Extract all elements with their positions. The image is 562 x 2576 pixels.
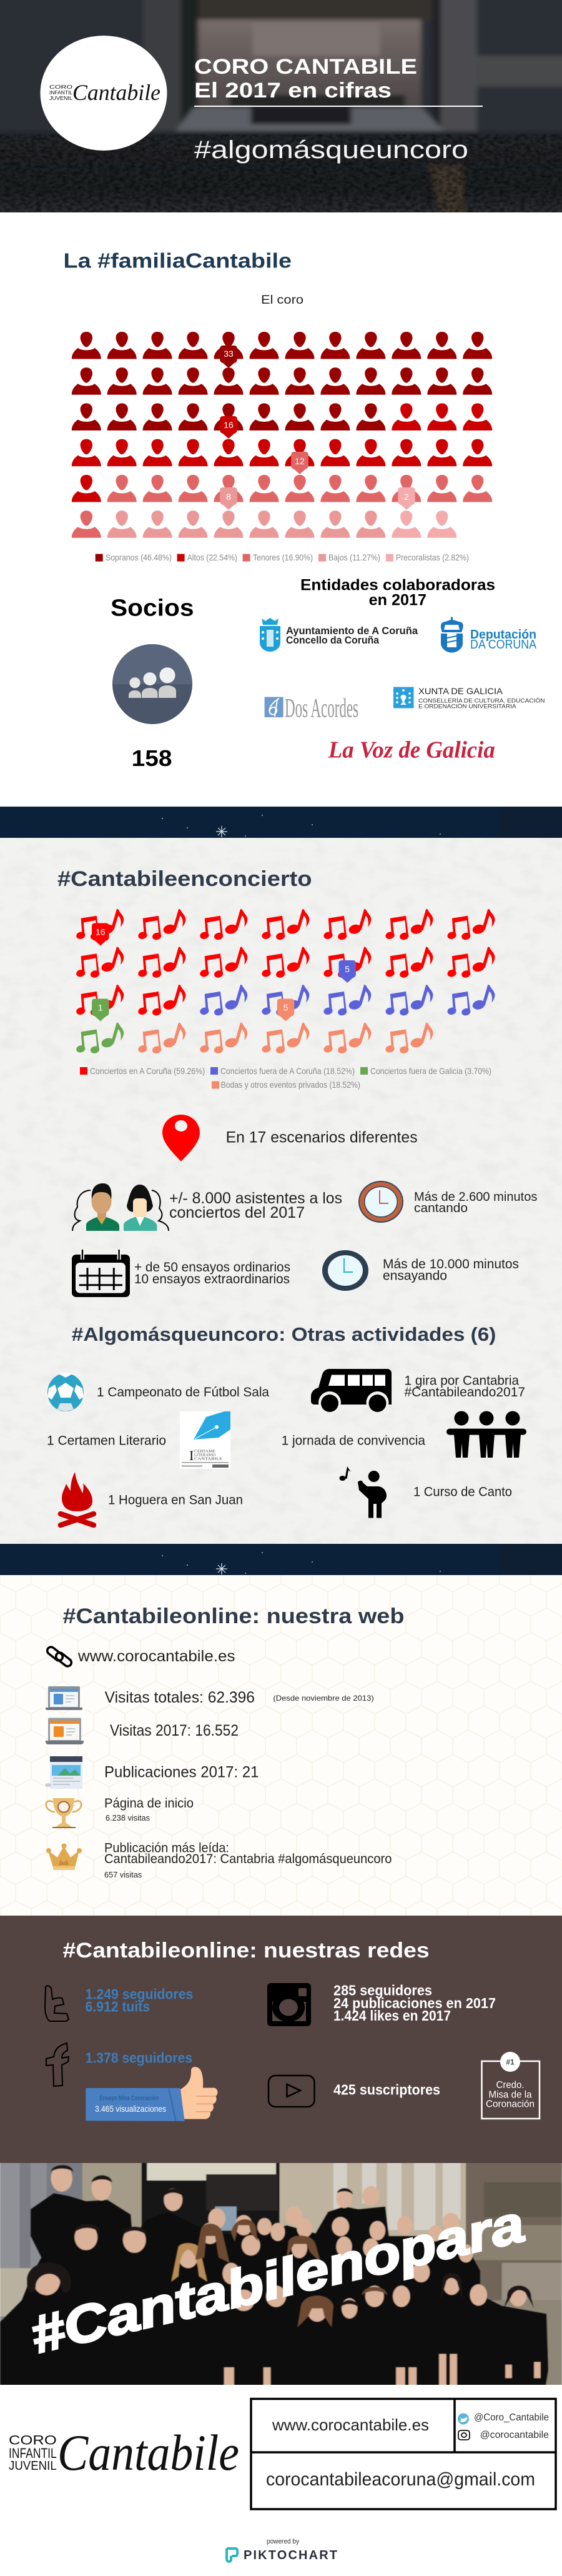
logo circle: Cantabile: JUVENIL (49, 96, 73, 101)
icon: facebook sketch (46, 2043, 69, 2086)
icon: group of members (112, 644, 192, 724)
text: publicacion mas leida (104, 1841, 392, 1879)
callout: most viewed video: Credo. (496, 2080, 525, 2091)
band: starry night divider (0, 1544, 562, 1575)
logo: Ayuntamiento de A Coruña: Concello da Coruña (286, 634, 379, 646)
icon: twitter sketch (45, 1986, 69, 2021)
text: web url: www.corocantabile.es (77, 1648, 235, 1665)
icon: calendar (72, 1250, 130, 1297)
hair of the choir (27, 2165, 534, 2309)
heading: nuestras redes: #Cantabileonline: nuestras redes (62, 1939, 430, 1962)
title: El 2017 en cifras (194, 79, 392, 102)
chart title: El coro: El coro (261, 294, 303, 307)
logo: Dos Acordes: Dos Acordes (285, 694, 358, 724)
value tags: 5 (283, 1002, 288, 1012)
text: pagina de inicio (104, 1796, 194, 1823)
logo: Ayuntamiento de A Coruña (260, 618, 418, 652)
text: website: www.corocantabile.es (272, 2415, 429, 2434)
text: futbol: 1 Campeonato de Fútbol Sala (97, 1385, 269, 1400)
panel: group photo of the choir (0, 2156, 562, 2392)
footer: powered by Piktochart: PIKTOCHART (244, 2549, 337, 2562)
icon: clock orange (358, 1181, 403, 1223)
text: pagina de inicio: 6.238 visitas (106, 1813, 150, 1823)
text: gira: #Cantabileando2017 (405, 1385, 525, 1400)
callout: most viewed video (482, 2052, 540, 2119)
overlay slogan: #Cantabilenopara (25, 2194, 530, 2365)
text: visitas totales: Visitas totales: 62.396 (105, 1689, 255, 1706)
value tags: 12 (295, 456, 305, 466)
text: ensayos: + de 50 ensayos ordinarios (134, 1260, 290, 1275)
icon: laptop blue (46, 1686, 82, 1710)
text: twitter numbers (86, 1986, 193, 2015)
legend: concerts: Conciertos fuera de A Coruña (18.52%) (220, 1066, 355, 1076)
text: minutos ensayando: Más de 10.000 minutos (383, 1257, 519, 1271)
text: facebook numbers: 1.378 seguidores (86, 2050, 192, 2066)
value tags (92, 923, 356, 1021)
icon: publication (45, 1756, 82, 1789)
panel: Socios (111, 595, 194, 771)
icon: bonfire (61, 1472, 94, 1525)
text: instagram numbers: 24 publicaciones en 2017 (333, 1995, 496, 2011)
text: gira (405, 1373, 525, 1400)
legend: concerts: Bodas y otros eventos privados (18.52%) (221, 1080, 360, 1090)
logo: Coro Infantil Juvenil Cantabile: CORO (9, 2434, 57, 2448)
footer: powered by Piktochart (227, 2538, 337, 2562)
icon: twitter small (458, 2413, 469, 2424)
logo: Coro Infantil Juvenil Cantabile: JUVENIL (9, 2459, 57, 2473)
text: visitas totales (105, 1689, 374, 1706)
image: certamen poster: LITERARIO (194, 1453, 215, 1457)
panel: Socios: Socios (111, 595, 194, 622)
logo: Coro Infantil Juvenil Cantabile: Cantabile (57, 2424, 239, 2481)
logo: Xunta de Galicia: E ORDENACIÓN UNIVERSITARIA (418, 704, 516, 710)
icon: clock navy (322, 1250, 368, 1291)
icon: singer (340, 1466, 387, 1518)
value tags: 2 (404, 492, 409, 502)
logo circle: Cantabile (40, 36, 167, 151)
text: twitter handle: @Coro_Cantabile (474, 2412, 549, 2423)
image: certamen poster: CANTABILE (194, 1457, 222, 1461)
legend: choir voices: Tenores (16.90%) (253, 552, 313, 562)
heading: otras actividades: #Algomásqueuncoro: Otras actividades (6) (72, 1323, 496, 1345)
heading: nuestra web: #Cantabileonline: nuestra web (62, 1604, 405, 1628)
legend: concerts: Conciertos fuera de Galicia (3.70%) (370, 1066, 491, 1076)
icon: trophy (46, 1798, 81, 1828)
pictogram chart: concerts (76, 909, 495, 1054)
icon: instagram small (458, 2430, 470, 2440)
logo: Dos Acordes (265, 694, 358, 724)
logo: Deputación da Coruña: DA CORUÑA (470, 637, 537, 652)
text: curso: 1 Curso de Canto (413, 1485, 512, 1499)
icon: bus (311, 1369, 392, 1414)
panel: contact table (251, 2399, 556, 2509)
text: instagram handle: @corocantabile (480, 2430, 549, 2440)
text: minutos cantando: Más de 2.600 minutos (414, 1190, 537, 1204)
value tags: 5 (345, 964, 350, 974)
icon: instagram (267, 1983, 311, 2026)
text: visitas totales: (Desde noviembre de 2013) (273, 1694, 374, 1703)
legend: choir voices (96, 552, 469, 562)
legend: choir voices: Bajos (11.27%) (328, 552, 380, 562)
value tags: 1 (98, 1002, 103, 1012)
text: gira: 1 gira por Cantabria (405, 1373, 519, 1388)
text: minutos cantando (414, 1190, 537, 1215)
text: minutos cantando: cantando (414, 1201, 468, 1215)
icon: link (46, 1646, 73, 1668)
title: #algomásqueuncoro (194, 136, 468, 164)
text: instagram numbers (333, 1982, 496, 2024)
icon: football (47, 1373, 84, 1411)
value tags (220, 346, 415, 510)
icon: thumbs up with video views: Ensayo Misa Coronación (99, 2095, 159, 2102)
legend: choir voices: Altos (22.54%) (187, 552, 237, 562)
band: starry night divider (0, 807, 562, 838)
text: instagram numbers: 285 seguidores (333, 1982, 432, 1999)
icon: youtube (269, 2076, 315, 2107)
callout: most viewed video: #1 (506, 2058, 515, 2067)
text: twitter numbers: 1.249 seguidores (86, 1986, 193, 2002)
logo circle: Cantabile: CORO (49, 84, 72, 90)
text: youtube numbers: 425 suscriptores (333, 2082, 440, 2098)
logo: Deputación da Coruña (441, 617, 537, 653)
icon: three people (446, 1411, 526, 1458)
image: certamen poster: I (189, 1448, 194, 1463)
panel: Socios: 158 (132, 745, 172, 771)
panel: Entidades colaboradoras (260, 577, 545, 763)
legend: choir voices: Sopranos (46.48%) (106, 552, 172, 562)
text: hoguera: 1 Hoguera en San Juan (108, 1493, 243, 1508)
callout: most viewed video: Coronación (486, 2099, 535, 2110)
logo: Xunta de Galicia (393, 686, 545, 710)
text: publicaciones: Publicaciones 2017: 21 (104, 1764, 259, 1781)
value tags: 16 (96, 927, 106, 937)
logo: Xunta de Galicia: XUNTA DE GALICIA (418, 686, 503, 696)
text: certamen: 1 Certamen Literario (47, 1433, 166, 1448)
logo: Ayuntamiento de A Coruña: Ayuntamiento de A Coruña (286, 625, 418, 637)
panel: Entidades colaboradoras: en 2017 (369, 592, 426, 609)
text: asistentes: conciertos del 2017 (169, 1204, 305, 1221)
text: publicacion mas leida: Cantabileando2017: Cantabria #algomásqueuncoro (104, 1852, 392, 1866)
image: certamen poster: CERTAME (194, 1450, 215, 1453)
heading: La #familiaCantabile: La #familiaCantabile (64, 249, 292, 272)
legend: concerts: Conciertos en A Coruña (59.26%) (90, 1066, 205, 1076)
logo: Coro Infantil Juvenil Cantabile: INFANTIL (9, 2445, 57, 2461)
panel: header photo of the concert hall (0, 0, 562, 226)
icon: map pin (162, 1115, 200, 1161)
text: asistentes (169, 1190, 342, 1221)
pictogram chart: choir voices (72, 332, 492, 538)
heading: #Cantabileenconcierto: #Cantabileenconcierto (57, 867, 312, 891)
icon: thumbs up with video views: 3.465 visualizaciones (95, 2104, 166, 2114)
value tags: 33 (224, 349, 234, 359)
text: instagram numbers: 1.424 likes en 2017 (333, 2007, 451, 2024)
value tags: 16 (224, 420, 234, 430)
icon: thumbs up with video views (86, 2067, 218, 2121)
footer: powered by Piktochart: powered by (267, 2538, 299, 2545)
logo circle: Cantabile: Cantabile (72, 80, 160, 105)
logo: Deputación da Coruña: Deputación (470, 628, 536, 642)
text: pagina de inicio: Página de inicio (104, 1796, 194, 1811)
logo: Xunta de Galicia: CONSELLERÍA DE CULTURA, EDUCACIÓN (418, 697, 545, 705)
text: email: corocantabileacoruna@gmail.com (266, 2469, 535, 2490)
text: publicacion mas leida: Publicación más leída: (104, 1841, 229, 1855)
legend: concerts (80, 1066, 491, 1090)
icon: laptop orange (46, 1718, 84, 1744)
text: ensayos: 10 ensayos extraordinarios (134, 1272, 290, 1286)
legend: choir voices: Precoralistas (2.82%) (396, 552, 469, 562)
icon: crown (46, 1843, 82, 1870)
text: ensayos (134, 1260, 290, 1286)
text: twitter numbers: 6.912 tuits (86, 1999, 150, 2015)
faces of the choir (33, 2165, 541, 2392)
title: CORO CANTABILE (194, 55, 417, 79)
text: minutos ensayando (383, 1257, 519, 1283)
blond and brown long hair (171, 2243, 207, 2282)
panel: Entidades colaboradoras: Entidades colaboradoras (300, 577, 495, 594)
text: jornada: 1 jornada de convivencia (282, 1433, 425, 1448)
logo: La Voz de Galicia: La Voz de Galicia (328, 737, 495, 763)
text: minutos ensayando: ensayando (383, 1269, 447, 1283)
logo circle: Cantabile: INFANTIL (49, 90, 73, 96)
callout: most viewed video: Misa de la (488, 2090, 532, 2101)
text: asistentes: +/- 8.000 asistentes a los (169, 1190, 342, 1207)
value tags: 8 (226, 492, 231, 502)
text: escenarios: En 17 escenarios diferentes (226, 1128, 418, 1146)
text: publicacion mas leida: 657 visitas (104, 1870, 142, 1879)
title (194, 55, 483, 164)
image: certamen poster (180, 1411, 230, 1469)
icon: audience people (72, 1183, 169, 1231)
text: visitas 2017: Visitas 2017: 16.552 (110, 1722, 239, 1739)
